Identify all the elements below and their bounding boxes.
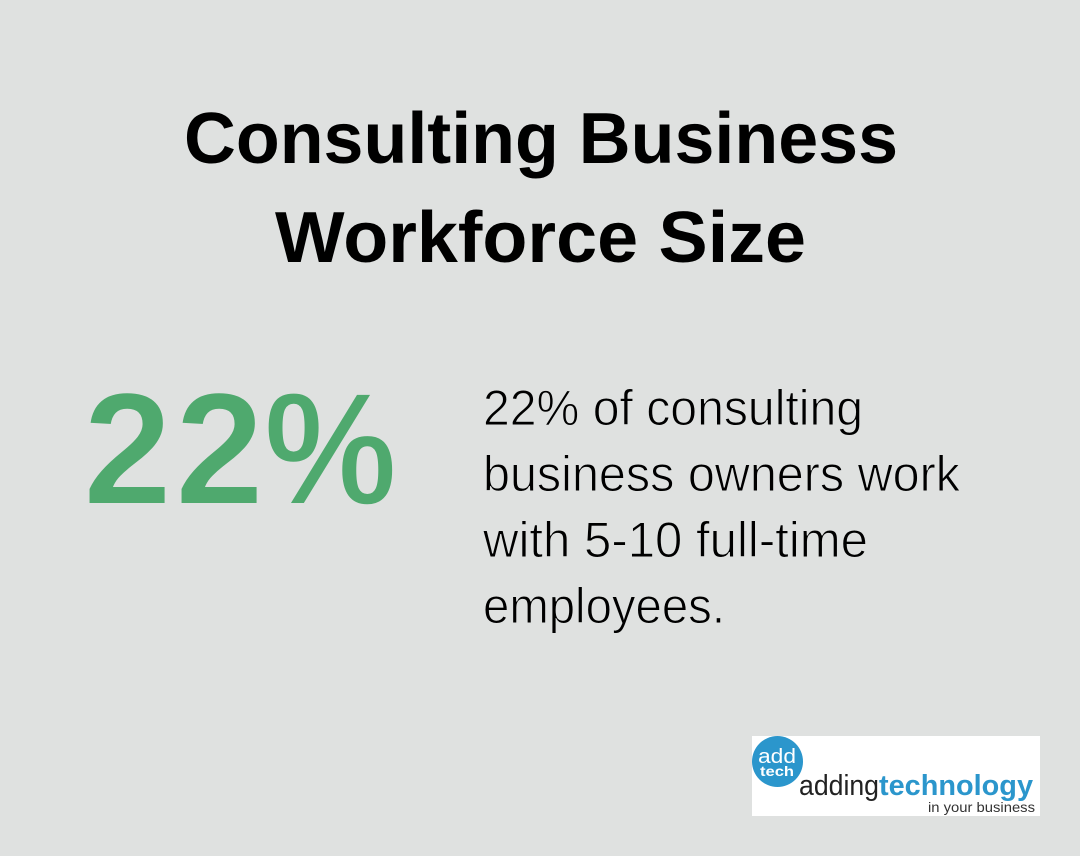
- description text: business owners work: [483, 446, 961, 502]
- big statistic: 22%: %: [264, 359, 397, 538]
- big statistic: 22%: 22: [83, 359, 264, 538]
- description text: 22% of consulting: [483, 380, 863, 436]
- logo badge: add tech: add: [758, 746, 796, 768]
- logo badge: add tech: tech: [760, 763, 794, 779]
- description text: [482, 380, 961, 634]
- logo background: [752, 736, 1040, 816]
- logo wordmark: technology: [879, 770, 1033, 802]
- logo tagline: in your business: [928, 799, 1035, 815]
- title: Workforce Size: [275, 198, 806, 278]
- logo: adding technology: [752, 736, 1040, 816]
- title: [184, 99, 898, 278]
- description text: with 5-10 full-time: [482, 512, 868, 568]
- big statistic: 22%: [83, 359, 397, 538]
- title: Consulting Business: [184, 99, 898, 179]
- logo wordmark: adding: [799, 770, 879, 802]
- logo wordmark: [799, 770, 1033, 802]
- logo badge: add tech: [752, 736, 803, 787]
- description text: employees.: [483, 578, 725, 634]
